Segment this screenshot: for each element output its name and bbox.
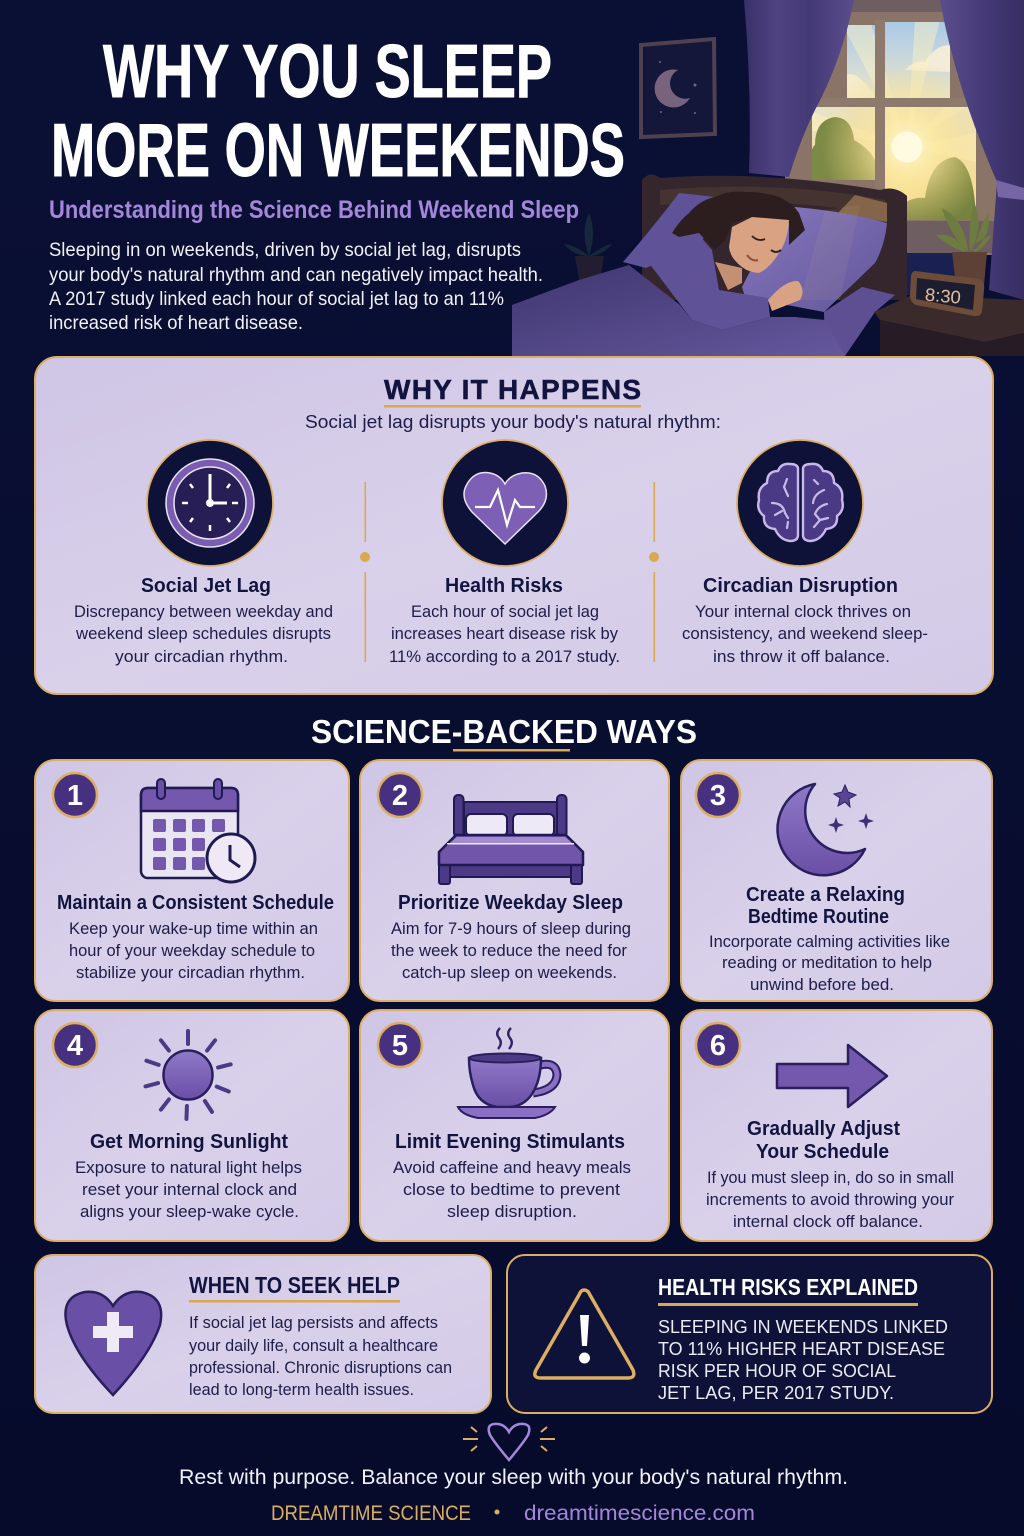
icon: heart with pulse <box>442 440 568 566</box>
neck <box>715 262 742 290</box>
text 5: sleep disruption. <box>447 1202 577 1221</box>
icon: coffee cup <box>458 1028 557 1118</box>
heading underline <box>384 405 641 408</box>
badge 3 <box>696 773 740 817</box>
text 5: close to bedtime to prevent <box>403 1180 620 1199</box>
column: health risks: Each hour of social jet lag <box>411 602 599 621</box>
icon: footer heart with rays <box>463 1424 555 1460</box>
text 3 <box>709 884 950 994</box>
light across pillow <box>800 205 860 300</box>
heading: health risks explained: HEALTH RISKS EXPLAINED <box>658 1274 918 1300</box>
underline <box>658 1303 918 1306</box>
icon: sun <box>145 1031 231 1119</box>
badge 4: 4 <box>67 1030 83 1062</box>
divider left <box>360 482 370 662</box>
text 5 <box>393 1131 631 1221</box>
text 2: Aim for 7-9 hours of sleep during <box>391 919 631 938</box>
column: health risks <box>389 575 620 666</box>
icon: framed moon picture <box>641 39 715 137</box>
footer tagline: Rest with purpose. Balance your sleep with your body's natural rhythm. <box>179 1465 848 1489</box>
divider right <box>649 482 659 662</box>
intro paragraph: your body's natural rhythm and can negatively impact health. <box>49 264 543 286</box>
column: circadian disruption: ins throw it off balance. <box>713 647 890 666</box>
text 2: catch-up sleep on weekends. <box>402 963 617 982</box>
intro paragraph: increased risk of heart disease. <box>49 312 303 334</box>
risks body text: RISK PER HOUR OF SOCIAL <box>658 1360 896 1381</box>
badge 2: 2 <box>392 780 408 812</box>
column: health risks: 11% according to a 2017 study. <box>389 647 620 666</box>
plant on sill <box>936 202 991 285</box>
text 1: Maintain a Consistent Schedule <box>57 892 334 914</box>
column: health risks: increases heart disease risk by <box>391 624 618 643</box>
column: social jet lag: Social Jet Lag <box>141 575 271 597</box>
nightstand front <box>880 320 1024 356</box>
heading: why it happens: WHY IT HAPPENS <box>384 374 641 405</box>
icon: dim background plant <box>564 213 612 280</box>
footer brand <box>271 1502 755 1525</box>
text 2 <box>391 892 631 982</box>
text 1: hour of your weekday schedule to <box>69 941 315 960</box>
heading: when to seek help: WHEN TO SEEK HELP <box>189 1272 400 1298</box>
window with sun <box>780 0 1000 255</box>
text 6: internal clock off balance. <box>733 1212 923 1231</box>
text 5: Avoid caffeine and heavy meals <box>393 1158 631 1177</box>
card 6: gradually adjust <box>681 1010 992 1241</box>
text 6: Your Schedule <box>756 1141 889 1163</box>
text 4: Get Morning Sunlight <box>90 1131 288 1153</box>
text 3: Incorporate calming activities like <box>709 932 950 951</box>
column: social jet lag: your circadian rhythm. <box>115 647 288 666</box>
help body text: lead to long-term health issues. <box>189 1381 414 1399</box>
text 1: Keep your wake-up time within an <box>69 919 318 938</box>
help body text: professional. Chronic disruptions can <box>189 1359 452 1377</box>
text 4 <box>75 1131 302 1221</box>
text 3: Bedtime Routine <box>748 906 889 928</box>
panel: why it happens <box>35 357 993 694</box>
blanket <box>512 265 845 356</box>
help body text: your daily life, consult a healthcare <box>189 1337 438 1355</box>
card 5: evening stimulants <box>360 1010 669 1241</box>
risks body text: TO 11% HIGHER HEART DISEASE <box>658 1338 945 1359</box>
hero illustration: sleeping woman in bedroom <box>512 0 1024 356</box>
title: WHY YOU SLEEP <box>103 29 552 113</box>
intro paragraph: A 2017 study linked each hour of social jet lag to an 11% <box>49 288 504 310</box>
badge 5 <box>378 1023 422 1067</box>
footer brand: dreamtimescience.com <box>524 1502 755 1525</box>
right curtain <box>940 0 1024 300</box>
card 3: bedtime routine <box>681 760 992 1001</box>
column: social jet lag <box>74 575 333 666</box>
digital clock 8:30 <box>910 271 984 316</box>
text 4: Exposure to natural light helps <box>75 1158 302 1177</box>
mouth <box>747 255 758 260</box>
text 1 <box>57 892 334 982</box>
icon: warning triangle <box>535 1290 634 1378</box>
left curtain <box>744 0 854 177</box>
risks body text: SLEEPING IN WEEKENDS LINKED <box>658 1316 948 1337</box>
risks body text <box>658 1316 948 1403</box>
badge 2 <box>378 773 422 817</box>
badge 1: 1 <box>67 780 83 812</box>
curtain tieback <box>996 180 1024 200</box>
text 6 <box>706 1118 954 1231</box>
underline <box>189 1300 400 1302</box>
front pillow <box>742 207 887 312</box>
mattress edge <box>824 287 895 356</box>
text 3: Create a Relaxing <box>746 884 905 906</box>
column: social jet lag: weekend sleep schedules disrupts <box>75 624 331 643</box>
icon: clock <box>147 440 273 566</box>
badge 6 <box>696 1023 740 1067</box>
text 2: Prioritize Weekday Sleep <box>398 892 623 914</box>
help body text: If social jet lag persists and affects <box>189 1314 438 1332</box>
title: MORE ON WEEKENDS <box>51 108 625 192</box>
text 5: Limit Evening Stimulants <box>395 1131 625 1153</box>
text 4: reset your internal clock and <box>82 1180 297 1199</box>
column: circadian disruption <box>682 575 928 666</box>
column: circadian disruption: Your internal clock thrives on <box>695 602 911 621</box>
text 1: stabilize your circadian rhythm. <box>76 963 305 982</box>
subtitle: Understanding the Science Behind Weekend Sleep <box>49 196 579 224</box>
column: health risks: Health Risks <box>445 575 563 597</box>
badge 3: 3 <box>710 780 726 812</box>
digital clock 8:30: 8:30 <box>924 285 962 308</box>
text 6: Gradually Adjust <box>747 1118 900 1140</box>
text 4: aligns your sleep-wake cycle. <box>80 1202 299 1221</box>
icon: bed <box>439 795 583 884</box>
text 6: increments to avoid throwing your <box>706 1190 954 1209</box>
title <box>51 29 625 192</box>
column: circadian disruption: consistency, and weekend sleep- <box>682 624 928 643</box>
headboard <box>642 174 907 300</box>
nightstand <box>874 295 1024 342</box>
closed eyes <box>752 236 781 252</box>
back pillow <box>623 193 722 268</box>
footer brand: DREAMTIME SCIENCE <box>271 1502 471 1525</box>
help body text <box>189 1314 452 1399</box>
column: social jet lag: Discrepancy between weekday and <box>74 602 333 621</box>
text 2: the week to reduce the need for <box>391 941 627 960</box>
text 3: reading or meditation to help <box>722 953 932 972</box>
intro paragraph: Sleeping in on weekends, driven by social jet lag, disrupts <box>49 239 521 261</box>
risks body text: JET LAG, PER 2017 STUDY. <box>658 1382 894 1403</box>
text 6: If you must sleep in, do so in small <box>707 1168 954 1187</box>
card 4: morning sunlight <box>35 1010 349 1241</box>
panel subtitle: Social jet lag disrupts your body's natural rhythm: <box>305 411 721 432</box>
panel: health risks explained <box>507 1255 992 1413</box>
badge 6: 6 <box>710 1030 726 1062</box>
card 2: weekday sleep <box>360 760 669 1001</box>
icon: moon and stars <box>777 784 874 875</box>
face <box>729 217 789 273</box>
column: circadian disruption: Circadian Disruption <box>703 575 898 597</box>
icon: brain <box>737 440 863 566</box>
card 1: consistent schedule <box>35 760 349 1001</box>
badge 4 <box>53 1023 97 1067</box>
wall below window <box>905 253 955 295</box>
hand <box>768 281 803 311</box>
heading: science-backed ways: SCIENCE-BACKED WAYS <box>311 713 697 750</box>
sleeve and torso <box>649 235 770 330</box>
hair <box>672 192 805 250</box>
panel: when to seek help <box>35 1255 491 1413</box>
icon: arrow <box>777 1045 887 1107</box>
badge 5: 5 <box>392 1030 408 1062</box>
text 3: unwind before bed. <box>750 975 894 994</box>
icon: heart with cross <box>65 1292 161 1395</box>
badge 1 <box>53 773 97 817</box>
intro paragraph <box>49 239 543 334</box>
icon: calendar with clock <box>141 779 255 882</box>
